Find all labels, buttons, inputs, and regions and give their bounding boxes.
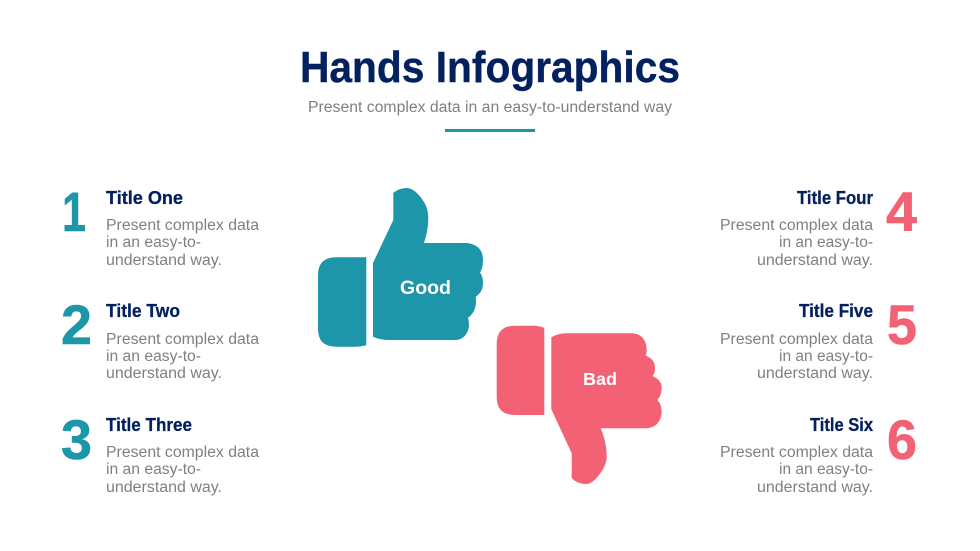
- body text: Present complex data: [106, 217, 259, 234]
- body text: understand way.: [757, 479, 873, 496]
- body text: understand way.: [106, 252, 222, 269]
- body text: in an easy-to-: [106, 234, 201, 251]
- label: Good: Good: [400, 278, 451, 299]
- heading: Title Two: Title Two: [106, 300, 180, 321]
- number 4: 4: [886, 180, 917, 243]
- heading: Title Four: Title Four: [797, 187, 873, 208]
- icon: thumbs up: [318, 188, 483, 347]
- body text: understand way.: [106, 479, 222, 496]
- heading: Title One: Title One: [106, 187, 183, 208]
- body text: understand way.: [757, 252, 873, 269]
- heading: Title Three: Title Three: [106, 414, 192, 435]
- title: Hands Infographics: [300, 43, 680, 92]
- body text: in an easy-to-: [106, 348, 201, 365]
- thumbs down cuff: [497, 326, 544, 415]
- panel: item six: [720, 408, 917, 496]
- body text: in an easy-to-: [106, 461, 201, 478]
- panel: item five: [720, 293, 917, 382]
- number 1: 1: [62, 180, 86, 243]
- panel: item two: [61, 293, 259, 382]
- heading: Title Five: Title Five: [799, 300, 873, 321]
- number 6: 6: [887, 408, 917, 471]
- subtitle: Present complex data in an easy-to-understand way: [308, 99, 672, 116]
- body text: in an easy-to-: [779, 234, 873, 251]
- header: [300, 43, 680, 132]
- thumbs up cuff: [318, 257, 366, 347]
- panel: item one: [62, 180, 259, 269]
- body text: in an easy-to-: [779, 461, 873, 478]
- number 3: 3: [61, 408, 92, 471]
- body text: in an easy-to-: [779, 348, 873, 365]
- number 2: 2: [61, 293, 92, 356]
- body text: Present complex data: [720, 331, 873, 348]
- body text: understand way.: [757, 365, 873, 382]
- number 5: 5: [887, 293, 917, 356]
- panel: item four: [720, 180, 917, 269]
- heading: Title Six: Title Six: [810, 414, 874, 435]
- body text: Present complex data: [720, 217, 873, 234]
- panel: item three: [61, 408, 259, 496]
- icon: thumbs down: [497, 326, 662, 484]
- body text: Present complex data: [106, 444, 259, 461]
- label: Bad: Bad: [583, 369, 617, 389]
- title underline: [445, 129, 535, 132]
- body text: Present complex data: [720, 444, 873, 461]
- thumbs up hand: [373, 188, 483, 340]
- body text: understand way.: [106, 365, 222, 382]
- body text: Present complex data: [106, 331, 259, 348]
- thumbs down hand: [551, 333, 662, 484]
